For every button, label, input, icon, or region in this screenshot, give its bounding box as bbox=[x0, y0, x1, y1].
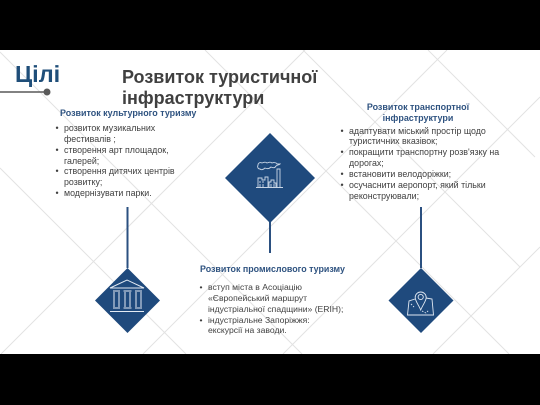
list: transport infrastructure: адаптувати міський простір щодо bbox=[349, 126, 486, 136]
text: • bbox=[340, 169, 344, 179]
list: transport infrastructure: дорогах; bbox=[349, 158, 384, 168]
text: • bbox=[56, 166, 59, 176]
text: • bbox=[56, 188, 59, 198]
list: culture tourism: розвитку; bbox=[64, 177, 102, 187]
list: culture tourism: розвиток музикальних bbox=[64, 123, 155, 133]
list: industrial tourism: екскурсії на заводи. bbox=[208, 325, 287, 335]
list: industrial tourism bbox=[200, 282, 343, 335]
list: culture tourism: створення дитячих центрів bbox=[64, 166, 175, 176]
list: industrial tourism: індустріальної спадщини» (ERIH); bbox=[208, 304, 343, 314]
text: • bbox=[340, 147, 344, 157]
list: transport infrastructure: осучаснити аеропорт, який тільки bbox=[349, 180, 486, 190]
title: Розвиток туристичної bbox=[122, 66, 317, 86]
goal marker line bbox=[0, 88, 50, 96]
title: інфраструктури bbox=[122, 88, 264, 108]
heading: transport infrastructure: Розвиток транспортної bbox=[367, 102, 469, 112]
list: culture tourism bbox=[56, 123, 175, 198]
heading: transport infrastructure: інфраструктури bbox=[383, 113, 453, 123]
heading: transport infrastructure bbox=[367, 102, 470, 123]
list: culture tourism: галерей; bbox=[64, 156, 99, 166]
text: • bbox=[340, 180, 344, 190]
text: • bbox=[200, 282, 203, 292]
connector: transport bbox=[420, 207, 422, 268]
list: transport infrastructure: туристичних вказівок; bbox=[349, 136, 438, 146]
icon: factory diamond bbox=[225, 133, 315, 223]
title bbox=[122, 66, 318, 108]
text: • bbox=[56, 145, 59, 155]
list: culture tourism: фестивалів ; bbox=[64, 134, 116, 144]
list: transport infrastructure bbox=[340, 126, 500, 201]
heading: industrial tourism: Розвиток промислового туризму bbox=[200, 264, 345, 274]
connector: industry bbox=[269, 222, 271, 253]
text: • bbox=[340, 126, 344, 136]
top black band bbox=[0, 0, 540, 50]
heading: goals: Цілі bbox=[15, 61, 60, 87]
text: • bbox=[200, 315, 203, 325]
list: transport infrastructure: встановити велодоріжки; bbox=[349, 169, 451, 179]
icon: museum diamond bbox=[95, 268, 160, 333]
icon: map pin diamond bbox=[388, 268, 454, 333]
list: transport infrastructure: реконструювали; bbox=[349, 191, 419, 201]
list: transport infrastructure: покращити транспортну розв'язку на bbox=[349, 147, 499, 157]
list: culture tourism: модернізувати парки. bbox=[64, 188, 152, 198]
list: culture tourism: створення арт площадок, bbox=[64, 145, 169, 155]
list: industrial tourism: індустріальне Запоріжжя: bbox=[208, 315, 310, 325]
bottom black band bbox=[0, 354, 540, 405]
text: • bbox=[56, 123, 59, 133]
heading: culture tourism: Розвиток культурного туризму bbox=[60, 108, 196, 118]
connector: culture bbox=[126, 207, 128, 268]
list: industrial tourism: «Європейський маршрут bbox=[208, 293, 307, 303]
list: industrial tourism: вступ міста в Асоціацію bbox=[208, 282, 302, 292]
